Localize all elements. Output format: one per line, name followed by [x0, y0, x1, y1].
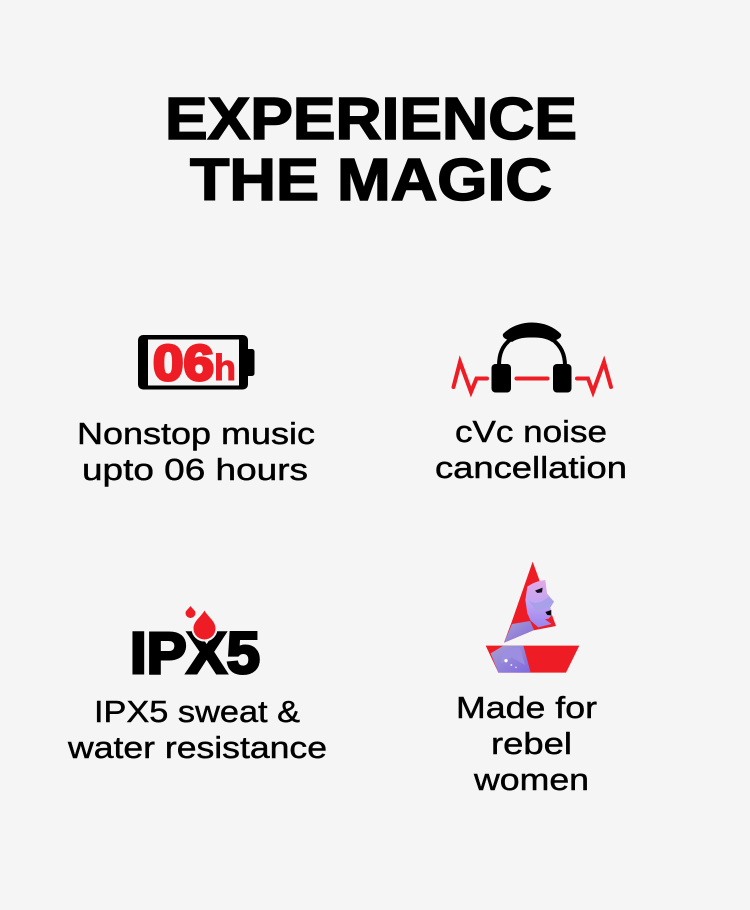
icon: woman profile in red sail boat — [486, 562, 579, 673]
feature label: battery — [77, 416, 315, 487]
feature label: noise cancellation: cVc noise — [455, 414, 607, 449]
panel: battery feature — [77, 335, 315, 487]
icon: headphones with sound pulses — [454, 322, 611, 392]
title: THE MAGIC — [190, 147, 552, 213]
feature label: rebel women: Made for — [456, 690, 597, 725]
icon: battery 06h: h — [214, 347, 236, 388]
icon: battery 06h — [138, 335, 254, 391]
panel: rebel women feature — [456, 562, 597, 797]
feature label: noise cancellation — [435, 414, 627, 485]
feature label: noise cancellation: cancellation — [435, 450, 627, 485]
title — [165, 86, 577, 213]
icon: IPX5 with water drops: IPX5 — [130, 621, 260, 686]
panel: water resistance feature — [67, 606, 327, 765]
panel: noise cancellation feature — [435, 322, 627, 485]
feature label: water resistance — [67, 694, 327, 765]
title: EXPERIENCE — [165, 86, 577, 152]
feature label: rebel women: women — [473, 762, 589, 797]
feature label: battery: upto 06 hours — [82, 452, 308, 487]
feature label: water resistance: water resistance — [67, 730, 327, 765]
icon: battery 06h: 06 — [153, 335, 214, 391]
feature label: battery: Nonstop music — [77, 416, 315, 451]
feature label: water resistance: IPX5 sweat & — [94, 694, 300, 729]
feature label: rebel women — [456, 690, 597, 797]
feature label: rebel women: rebel — [491, 726, 572, 761]
